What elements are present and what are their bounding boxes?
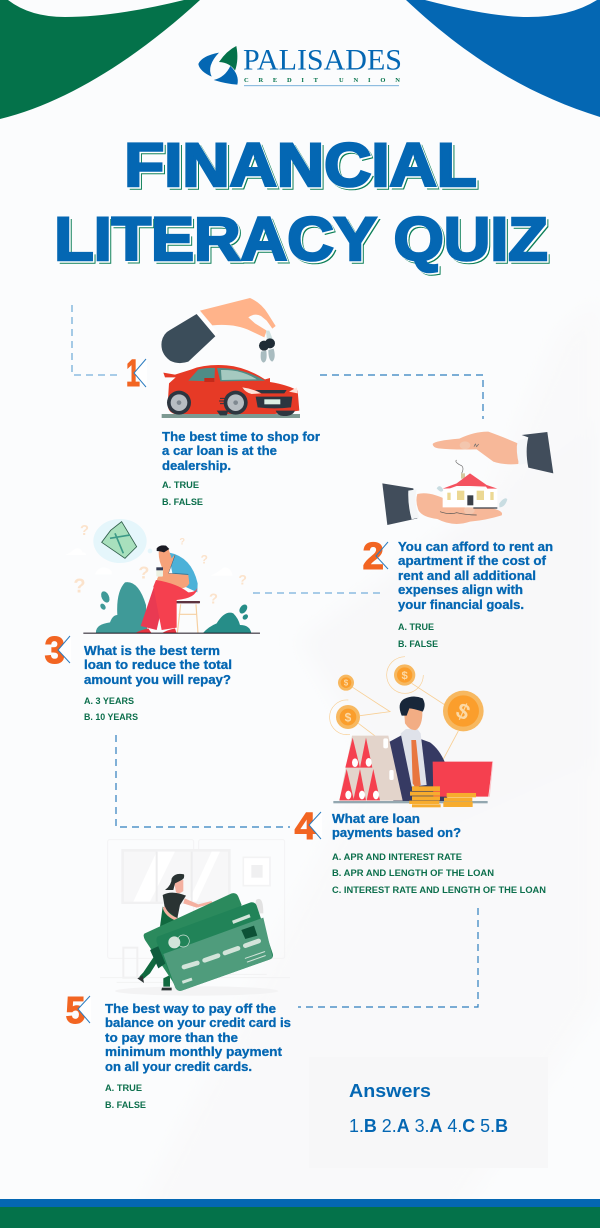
question 1 text: The best time to shop for: [162, 430, 320, 444]
question 2 options: A. TRUE: [398, 622, 435, 633]
footer band: blue: [0, 1199, 600, 1207]
question 2 text: You can afford to rent an: [398, 540, 553, 554]
logo wordmark: PALISADES: [243, 44, 402, 76]
title: FINANCIAL: [124, 131, 477, 200]
question 5 text: The best way to pay off the: [105, 1002, 276, 1016]
question 3 text: loan to reduce the total: [84, 658, 232, 672]
connector: question 4 to question 5: [298, 908, 478, 1007]
panel: question 4: [294, 657, 546, 896]
illustration: man on stool thinking about money: [65, 519, 260, 634]
question 2 text: apartment if the cost of: [398, 554, 547, 568]
question 5 text: balance on your credit card is: [105, 1016, 291, 1030]
question 3 text: [84, 644, 232, 687]
illustration: man on stool thinking about money: ?: [201, 552, 208, 566]
question 1 options: B. FALSE: [162, 497, 204, 508]
question 2 text: expenses align with: [398, 583, 523, 597]
illustration: man on stool thinking about money: ?: [209, 592, 218, 608]
illustration: two hands protecting a house: [382, 432, 553, 525]
illustration: hand dropping keys above red car: [161, 298, 300, 418]
question 5 text: to pay more than the: [105, 1031, 238, 1045]
panel: question 2: [362, 432, 553, 650]
title: LITERACY QUIZ: [56, 206, 549, 276]
illustration: man on stool thinking about money: ?: [138, 562, 149, 582]
question 1 text: dealership.: [162, 459, 231, 473]
question 3 options: [84, 696, 139, 723]
question 5 options: B. FALSE: [105, 1100, 147, 1111]
connector: question 1 to question 2: [320, 375, 483, 419]
question 1 options: [162, 480, 204, 508]
question 5 text: on all your credit cards.: [105, 1060, 252, 1074]
title: LITERACY QUIZ: [57, 208, 550, 276]
illustration: man on stool thinking about money: ?: [80, 523, 89, 539]
illustration: businessman with house of cards and coins: $: [452, 698, 474, 725]
question 4 options: A. APR AND INTEREST RATE: [332, 852, 463, 863]
illustration: man on stool thinking about money: ?: [179, 536, 185, 546]
answers heading: Answers: [349, 1080, 431, 1101]
panel: question 5: [66, 840, 291, 1111]
panel: question 1: [126, 298, 320, 508]
question 1 options: A. TRUE: [162, 480, 200, 491]
question 5 options: A. TRUE: [105, 1083, 143, 1094]
illustration: businessman with house of cards and coins: [330, 657, 493, 807]
illustration: woman pushing credit cards: [100, 840, 290, 996]
question 3 text: amount you will repay?: [84, 673, 231, 687]
question 3 options: A. 3 YEARS: [84, 696, 135, 707]
panel: answers: [309, 1057, 548, 1168]
connector: question 2 to question 3: [248, 592, 380, 594]
illustration: businessman with house of cards and coins: $: [402, 670, 409, 682]
question 2 text: [398, 540, 553, 612]
illustration: man on stool thinking about money: ?: [73, 575, 86, 597]
question 4 text: What are loan: [332, 812, 420, 826]
illustration: businessman with house of cards and coins: $: [344, 679, 349, 688]
question 4 text: [332, 812, 461, 840]
number 2: 2: [362, 536, 384, 578]
corner shape: green: [0, 0, 200, 119]
question 3 options: B. 10 YEARS: [84, 712, 139, 723]
logo: Palisades Credit Union: [198, 44, 402, 86]
question 3 text: What is the best term: [84, 644, 220, 658]
question 4 options: [332, 852, 546, 896]
number 3: 3: [44, 630, 65, 672]
connector: question 3 to question 4: [116, 735, 290, 827]
footer band: green: [0, 1207, 600, 1228]
illustration: man on stool thinking about money: ?: [238, 571, 247, 587]
question 4 options: C. INTEREST RATE AND LENGTH OF THE LOAN: [332, 885, 546, 896]
logo tagline: [244, 77, 400, 84]
connector: start to question 1: [72, 305, 122, 375]
question 2 text: your financial goals.: [398, 598, 524, 612]
title: LITERACY QUIZ: [54, 205, 548, 274]
number 1: 1: [126, 353, 140, 395]
title: [54, 131, 550, 276]
question 5 options: [105, 1083, 147, 1111]
logo tagline: UNION: [339, 77, 400, 84]
title: FINANCIAL: [126, 132, 478, 202]
question 1 text: a car loan is at the: [162, 444, 277, 458]
logo mark: [198, 46, 238, 85]
question 4 options: B. APR AND LENGTH OF THE LOAN: [332, 868, 494, 879]
panel: question 3: [44, 519, 260, 723]
question 5 text: minimum monthly payment: [105, 1045, 283, 1059]
number 4: 4: [294, 806, 316, 848]
question 1 text: [162, 430, 320, 473]
question 2 text: rent and all additional: [398, 569, 536, 583]
logo tagline: CREDIT: [244, 77, 319, 84]
question 4 text: payments based on?: [332, 826, 461, 840]
title: FINANCIAL: [127, 134, 479, 202]
number 5: 5: [66, 990, 86, 1032]
illustration: businessman with house of cards and coins: $: [345, 710, 352, 724]
question 5 text: [105, 1002, 291, 1074]
question 2 options: [398, 622, 439, 650]
answers list: 1.B 2.A 3.A 4.C 5.B: [349, 1116, 508, 1136]
corner shape: blue: [406, 0, 600, 117]
question 2 options: B. FALSE: [398, 639, 439, 650]
